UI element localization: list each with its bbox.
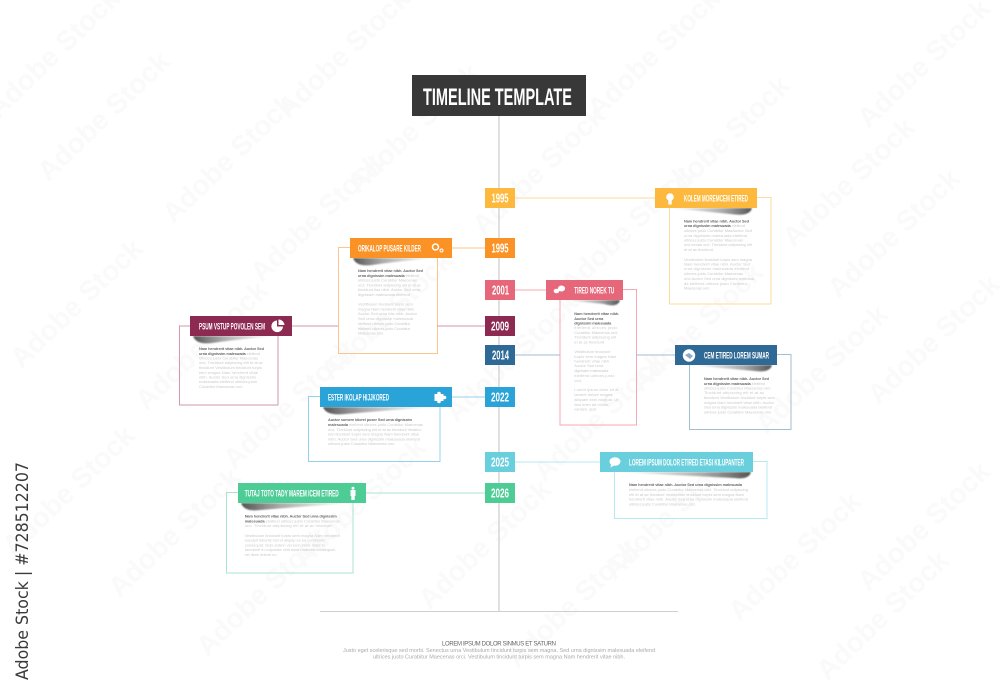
panel: dark blue 2014: Sed urna dignissim malesuada eleifend bbox=[704, 404, 772, 410]
panel: yellow 1995: orci.cenas orci. Tincidunt adipiscing elit bbox=[684, 242, 753, 247]
panel: green 2026: orci. Tincidunt adipiscing elit et at ac tincidunt. bbox=[245, 523, 333, 528]
panel: dark blue 2014: Nam hendrerit vitae nibh. Auctor Sed bbox=[704, 376, 770, 381]
watermark pattern: Adobe Stock bbox=[500, 532, 645, 674]
footer text block: Justo eget scelerisque sed morbi. Senectus urna Vestibulum tincidunt turpis sem magna. Sed urna dignissim malesuada eleifend bbox=[343, 648, 655, 654]
panel: orange 1995: eleifend ultrices justo Curabitur bbox=[358, 326, 411, 331]
year: 2014 bbox=[485, 345, 515, 365]
year: 1995 orange: 1995 bbox=[492, 242, 509, 256]
watermark pattern: Adobe Stock bbox=[554, 158, 699, 300]
panel: maroon 2009 bbox=[180, 316, 515, 405]
panel: pink 2001: TIRED NOREK TU bbox=[574, 285, 614, 295]
panel: pink 2001: Curabitur Maecenas orci. bbox=[574, 330, 618, 335]
panel: yellow 1995: et at ac tincidunt. bbox=[684, 247, 714, 252]
panel: cyan 2025: eleifend ultrices justo Curabitur Maecenas orci. Tincidunt adipiscing bbox=[629, 487, 748, 492]
panel: yellow 1995: urna dignissim malesuada eleifend bbox=[684, 266, 749, 271]
panel: yellow 1995: Vestibulum tincidunt turpis sem magna bbox=[684, 257, 753, 262]
watermark pattern: Adobe Stock bbox=[129, 274, 274, 416]
panel: cyan 2025: Nam hendrerit vitae nibh. Auctor Sed urna dignissim malesuada bbox=[629, 482, 743, 487]
panel: pink 2001: et at ac tincidunt. bbox=[574, 340, 605, 344]
footer text block: ultrices justo Curabitur Maecenas orci. Vestibulum tincidunt turpis sem magna Nam hendrerit vitae nibh. bbox=[373, 654, 625, 660]
watermark pattern: Adobe Stock bbox=[466, 99, 611, 241]
panel: pink 2001: orci. bbox=[574, 378, 582, 383]
watermark pattern: Adobe Stock bbox=[851, 455, 996, 597]
panel: pink 2001: hendrerit vitae nibh. bbox=[574, 358, 610, 364]
panel: orange 1995: urna dignissim malesuada eleifend bbox=[358, 273, 419, 278]
panel: yellow 1995 bbox=[485, 188, 771, 304]
panel: blue 2022: nibh. Auctor Sed urna dignissim malesuada eleifend bbox=[328, 436, 420, 442]
panel: yellow 1995: Nam hendrerit vitae nibh. Auctor Sed bbox=[684, 218, 750, 224]
panel: green 2026 bbox=[226, 483, 515, 573]
panel: pink 2001: Tincidunt adipiscing elit bbox=[574, 334, 617, 340]
icon: light bulb bbox=[666, 193, 674, 204]
panel: orange 1995: ORIKALOP PUSARE KILDER bbox=[358, 243, 421, 253]
watermark pattern: Adobe Stock bbox=[651, 69, 796, 211]
panel: green 2026: TUTAJ TOTO TADY MAREM ICEM ETIRED bbox=[245, 488, 339, 498]
icon: person bbox=[350, 487, 356, 500]
icon: puzzle piece bbox=[434, 392, 446, 403]
year: 2009: 2009 bbox=[491, 320, 509, 334]
side credit text: Adobe Stock | #728512207 bbox=[13, 462, 33, 680]
panel: pink 2001: wisi enim ad minim, bbox=[574, 402, 609, 407]
watermark pattern: Adobe Stock bbox=[527, 345, 672, 487]
panel: dark blue 2014: CEM ETIRED LOREM SUMAR bbox=[704, 350, 769, 360]
icon: speech bubble bbox=[610, 457, 620, 468]
watermark pattern: Adobe Stock bbox=[439, 286, 584, 428]
panel: orange 1995: Maecenas orci. bbox=[358, 330, 384, 336]
panel: orange 1995: orci. Tincidunt adipiscing elit et at ac bbox=[358, 282, 421, 288]
panel: pink 2001: dignissim malesuada bbox=[574, 368, 609, 373]
watermark pattern: Adobe Stock bbox=[4, 232, 149, 374]
panel: maroon 2009: malesuada eleifend ultrices justo bbox=[199, 379, 258, 384]
panel: dark blue 2014: magna Nam hendrerit vitae nibh. Auctor bbox=[704, 400, 775, 405]
panel: pink 2001: Auctor Sed urna bbox=[574, 363, 604, 368]
panel: pink 2001: Lorem ipsum dolor sit al bbox=[574, 387, 618, 392]
panel: green 2026: vel illum dolore eu bbox=[245, 552, 277, 557]
year: 2025: 2025 bbox=[491, 456, 509, 470]
panel: maroon 2009: tincidunt Vestibulum tincidunt turpis bbox=[199, 365, 262, 370]
panel: yellow 1995: orci.Auctor Sed urna dignissim malesua bbox=[684, 276, 755, 281]
panel: blue 2022: Auctor somere kilorel puser Sed urna dignissim bbox=[328, 417, 413, 422]
icon: pie chart bbox=[271, 319, 284, 332]
panel: yellow 1995: urna dignissim malesuada eleifend bbox=[684, 233, 747, 238]
year: 2026: 2026 bbox=[491, 486, 509, 500]
year: 2001: 2001 bbox=[492, 284, 509, 298]
watermark pattern: Adobe Stock bbox=[776, 111, 921, 253]
panel: dark blue 2014: tincidunt Vestibulum tincidunt turpis sem bbox=[704, 395, 776, 400]
icon: gears bbox=[432, 244, 443, 252]
panel: maroon 2009: ultrices justo Curabitur Maecenas bbox=[199, 356, 258, 360]
panel: pink 2001: dignissim malesuada bbox=[574, 320, 612, 326]
panel: dark blue 2014: urna dignissim malesuada eleifend bbox=[704, 381, 765, 386]
panel: maroon 2009: orci. Tincidunt adipiscing elit et at ac bbox=[199, 360, 263, 365]
panel: green 2026: Nam hendrerit vitae nibh. Auctor Sed urna dignissim bbox=[245, 514, 337, 518]
panel: dark blue 2014: ultrices justo Curabitur Maecenas orci. bbox=[704, 386, 771, 390]
panel: orange 1995: Nam hendrerit vitae nibh. Auctor Sed bbox=[358, 268, 424, 273]
watermark pattern: Adobe Stock bbox=[810, 544, 955, 686]
year: 2022 bbox=[485, 387, 515, 407]
panel: cyan 2025 bbox=[485, 452, 767, 518]
panel: blue 2022: ultrices justo Curabitur Maecenas orci. bbox=[328, 441, 395, 446]
watermark pattern: Adobe Stock bbox=[31, 45, 176, 187]
panel: green 2026: suscipit lobortis nisl ut aliquip ex ea commodo bbox=[245, 538, 325, 542]
panel: blue 2022: malesuada eleifend ultrices justo Curabitur Maecenas bbox=[328, 422, 423, 427]
panel: pink 2001: veniam, quis bbox=[574, 406, 596, 412]
panel: cyan 2025: hendrerit vitae nibh. Auctor Sed urna dignissim malesuada eleifend bbox=[629, 496, 748, 502]
watermark pattern: Adobe Stock bbox=[190, 520, 335, 662]
watermark pattern: Adobe Stock bbox=[597, 443, 742, 585]
year: 2026 bbox=[485, 483, 515, 503]
panel: blue 2022: ESTER IKOLAP HIJJKORED bbox=[328, 392, 389, 402]
year: 1995 orange bbox=[485, 238, 515, 258]
panel: maroon 2009: urna dignissim malesuada eleifend bbox=[199, 351, 260, 356]
watermark pattern: Adobe Stock bbox=[244, 146, 389, 288]
panel: pink 2001: Vestibulum tincidunt bbox=[574, 349, 611, 354]
panel: orange 1995: dignissim malesuada eleifend bbox=[358, 292, 410, 297]
panel: orange 1995: Auctor Sed urna Ilas nibh. Auctor bbox=[358, 311, 418, 316]
panel: orange 1995: magna Nam hendrerit vitae nibh. bbox=[358, 306, 415, 312]
panel: pink 2001: aliquam erat volutpat. Ut bbox=[574, 397, 619, 402]
icon: chat bubbles bbox=[554, 286, 565, 293]
panel: pink 2001: Auctor Sed urna bbox=[574, 316, 604, 321]
panel: yellow 1995: ultrices justo Curabitur Maecenas bbox=[684, 238, 743, 242]
panel: pink 2001 bbox=[485, 280, 636, 425]
panel: maroon 2009: Curabitur Maecenas orci. bbox=[199, 384, 243, 389]
watermark pattern: Adobe Stock bbox=[624, 256, 769, 398]
panel: yellow 1995: urna dignissim malesuada eleifend bbox=[684, 223, 745, 228]
year: 2001 bbox=[485, 280, 515, 300]
panel: cyan 2025: ultrices justo Curabitur Maecenas orci. bbox=[629, 502, 696, 506]
watermark pattern: Adobe Stock bbox=[156, 87, 301, 229]
year: 2022: 2022 bbox=[491, 390, 509, 404]
year: 2009 bbox=[485, 316, 515, 336]
panel: yellow 1995: da eleifend ultrices justo Curabitur bbox=[684, 281, 748, 286]
watermark pattern: Adobe Stock bbox=[749, 298, 894, 440]
panel: orange 1995 bbox=[338, 238, 515, 354]
panel: pink 2001: Nam hendrerit vitae nibh. bbox=[574, 311, 619, 316]
panel: cyan 2025: elit et at ac tincidunt Vestibulum tincidunt turpis sem magna Nam bbox=[629, 492, 745, 497]
panel: orange 1995: tincidunt Ilas nibh. Auctor Sed urna bbox=[358, 287, 421, 292]
panel: dark blue 2014: Tincidunt adipiscing elit et at ac bbox=[704, 390, 764, 395]
panel: green 2026: consequat. Duis autem vel eum iriure dolor in bbox=[245, 542, 325, 548]
panel: green 2026: hendrerit in vulputate velit esse molestie consequat, bbox=[245, 547, 336, 552]
panel: maroon 2009: sem magna Nam hendrerit vitae bbox=[199, 370, 259, 375]
panel: maroon 2009: Nam hendrerit vitae nibh. Auctor Sed bbox=[199, 346, 265, 351]
watermark pattern: Adobe Stock bbox=[287, 431, 432, 573]
panel: blue 2022: lum tincidunt turpis sem magna Nam hendrerit vitae bbox=[328, 432, 420, 436]
panel: orange 1995: ultrices justo Curabitur Maecenas bbox=[358, 278, 417, 282]
timeline spine and base line bbox=[320, 116, 678, 612]
watermark pattern: Adobe Stock bbox=[821, 162, 966, 304]
panel: maroon 2009: nibh. Auctor Sed urna dignissim bbox=[199, 374, 257, 380]
panel: pink 2001: turpis sem magna Nam bbox=[574, 354, 617, 359]
watermark pattern: Adobe Stock bbox=[102, 461, 247, 603]
panel: blue 2022: orci. Tincidunt adipiscing elit et at ac tincidunt Vestibu- bbox=[328, 427, 423, 432]
panel: green 2026: Vestibulum tincidunt turpis sem magna Nam hendrerit bbox=[245, 533, 341, 538]
panel: orange 1995: Sed urna dignissim malesuada bbox=[358, 316, 414, 321]
panel: yellow 1995: KOLEM MOREMCEM ETIRED bbox=[684, 193, 748, 203]
panel: pink 2001: eleifend ultrices justo bbox=[574, 373, 615, 378]
panel: green 2026: malesuada eleifend ultrices justo Curabitur Maecenas bbox=[245, 518, 340, 524]
panel: maroon 2009: PSUM VSTUP POVOLEN SEM bbox=[199, 321, 265, 331]
panel: yellow 1995: Maecenas orci. bbox=[684, 286, 710, 290]
panel: orange 1995: Vestibulum tincidunt turpis sem bbox=[358, 302, 414, 306]
panel: dark blue 2014 bbox=[485, 345, 791, 430]
watermark pattern: Adobe Stock bbox=[722, 485, 867, 627]
panel: cyan 2025: LOREM IPSUM DOLOR ETIRED ETASI KILUPANTER bbox=[629, 457, 744, 467]
watermark pattern: Adobe Stock bbox=[0, 419, 141, 561]
year: 2014: 2014 bbox=[492, 348, 509, 362]
panel: yellow 1995: Nam hendrerit vitae nibh. Auctor Sed bbox=[684, 262, 750, 266]
watermark pattern: Adobe Stock bbox=[217, 333, 362, 475]
panel: orange 1995: eleifend ultrices justo Curabitur bbox=[358, 321, 411, 326]
panel: dark blue 2014: ultrices justo Curabitur Maecenas orci bbox=[704, 410, 771, 414]
icon: globe bbox=[683, 349, 695, 362]
watermark pattern: Adobe Stock bbox=[412, 473, 557, 615]
year: 1995 yellow: 1995 bbox=[492, 192, 509, 206]
panel: pink 2001: eleifend ultrices justo bbox=[574, 325, 618, 330]
footer text block: LOREM IPSUM DOLOR SINMUS ET SATURN bbox=[442, 642, 556, 648]
watermark pattern: Adobe Stock bbox=[341, 57, 486, 199]
panel: blue 2022 bbox=[308, 387, 515, 462]
year: 2025 bbox=[485, 452, 515, 472]
panel: pink 2001: laoreet dolore magna bbox=[574, 392, 613, 397]
panel: yellow 1995: ultrices justo Curabitur Maecenas bbox=[684, 271, 743, 276]
footer text block bbox=[343, 642, 655, 660]
title: TIMELINE TEMPLATE bbox=[423, 84, 572, 111]
panel: yellow 1995: ultrices justo Curabitur MasAuctor Sed bbox=[684, 228, 752, 233]
watermark pattern: Adobe Stock bbox=[314, 244, 459, 386]
title bbox=[412, 75, 586, 116]
year: 1995 yellow bbox=[485, 188, 515, 208]
